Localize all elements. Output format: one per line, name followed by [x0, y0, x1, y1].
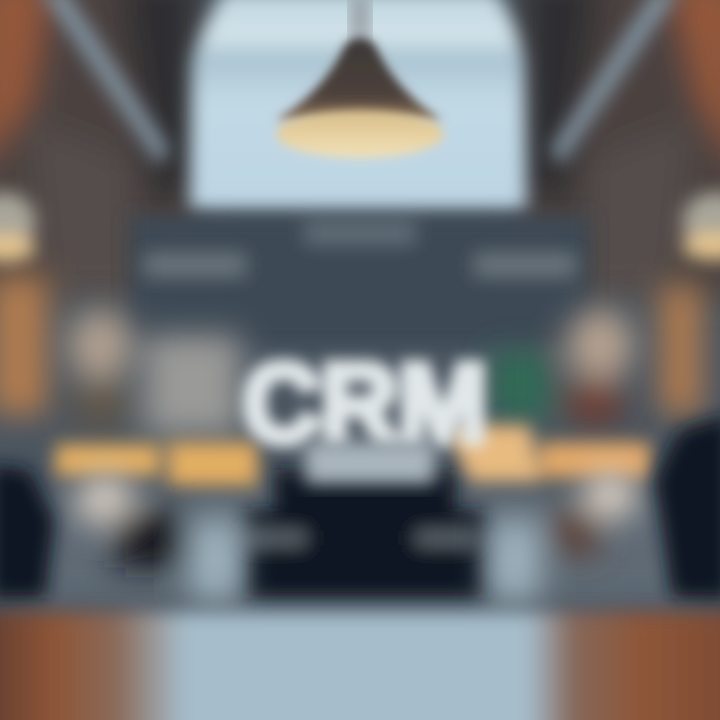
floor	[0, 612, 720, 720]
skylight window	[190, 0, 526, 210]
yellow tables	[55, 425, 650, 486]
lamp cord	[352, 0, 368, 40]
diagonal roof beams	[40, 0, 680, 165]
lower crowd band	[30, 490, 690, 605]
sign reflection	[305, 442, 435, 484]
dark central desk	[245, 470, 485, 598]
pendant lamp	[276, 0, 444, 158]
mid dark band	[130, 216, 590, 346]
lamp glow	[276, 110, 444, 158]
side lamps	[0, 192, 720, 262]
seated figures	[75, 471, 638, 600]
wood columns	[0, 275, 702, 415]
foreground person: left	[0, 465, 55, 598]
foreground person: right	[655, 415, 720, 598]
wooden ceiling sides	[0, 0, 720, 300]
CRM sign: CRM	[242, 341, 488, 466]
background figures	[68, 309, 634, 435]
lamp shade	[276, 38, 442, 120]
